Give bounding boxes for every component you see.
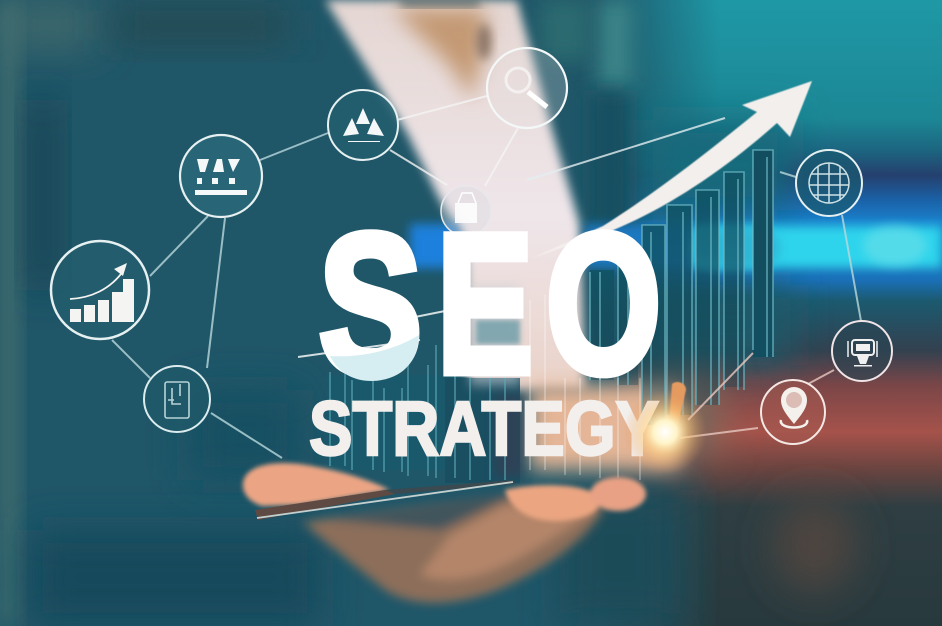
node: charts icon <box>180 135 262 217</box>
title: SEO <box>319 193 661 414</box>
reflection overlay on S <box>330 335 419 381</box>
node: location pin icon <box>761 380 825 444</box>
small bars under the text <box>328 285 640 483</box>
blue light streak <box>410 224 942 268</box>
node: magnifier icon <box>487 48 567 128</box>
node: tablet icon <box>144 366 210 432</box>
node: monitor icon <box>832 321 892 381</box>
phone edge <box>255 480 515 520</box>
hand <box>243 463 646 603</box>
lens flare <box>623 382 707 474</box>
node: center icon <box>441 186 491 236</box>
bar chart: rising bars <box>328 150 773 483</box>
title: SEO: O <box>546 193 661 414</box>
title: SEO: S <box>319 193 422 414</box>
subtitle: STRATEGY: STRATEGY <box>309 386 659 472</box>
network lines <box>112 96 861 458</box>
title: SEO: E <box>437 193 533 414</box>
shirt <box>325 0 680 470</box>
node: people icon <box>328 90 398 160</box>
node: growth chart icon <box>51 241 149 339</box>
node: globe icon <box>796 150 862 216</box>
arrow <box>532 81 812 258</box>
